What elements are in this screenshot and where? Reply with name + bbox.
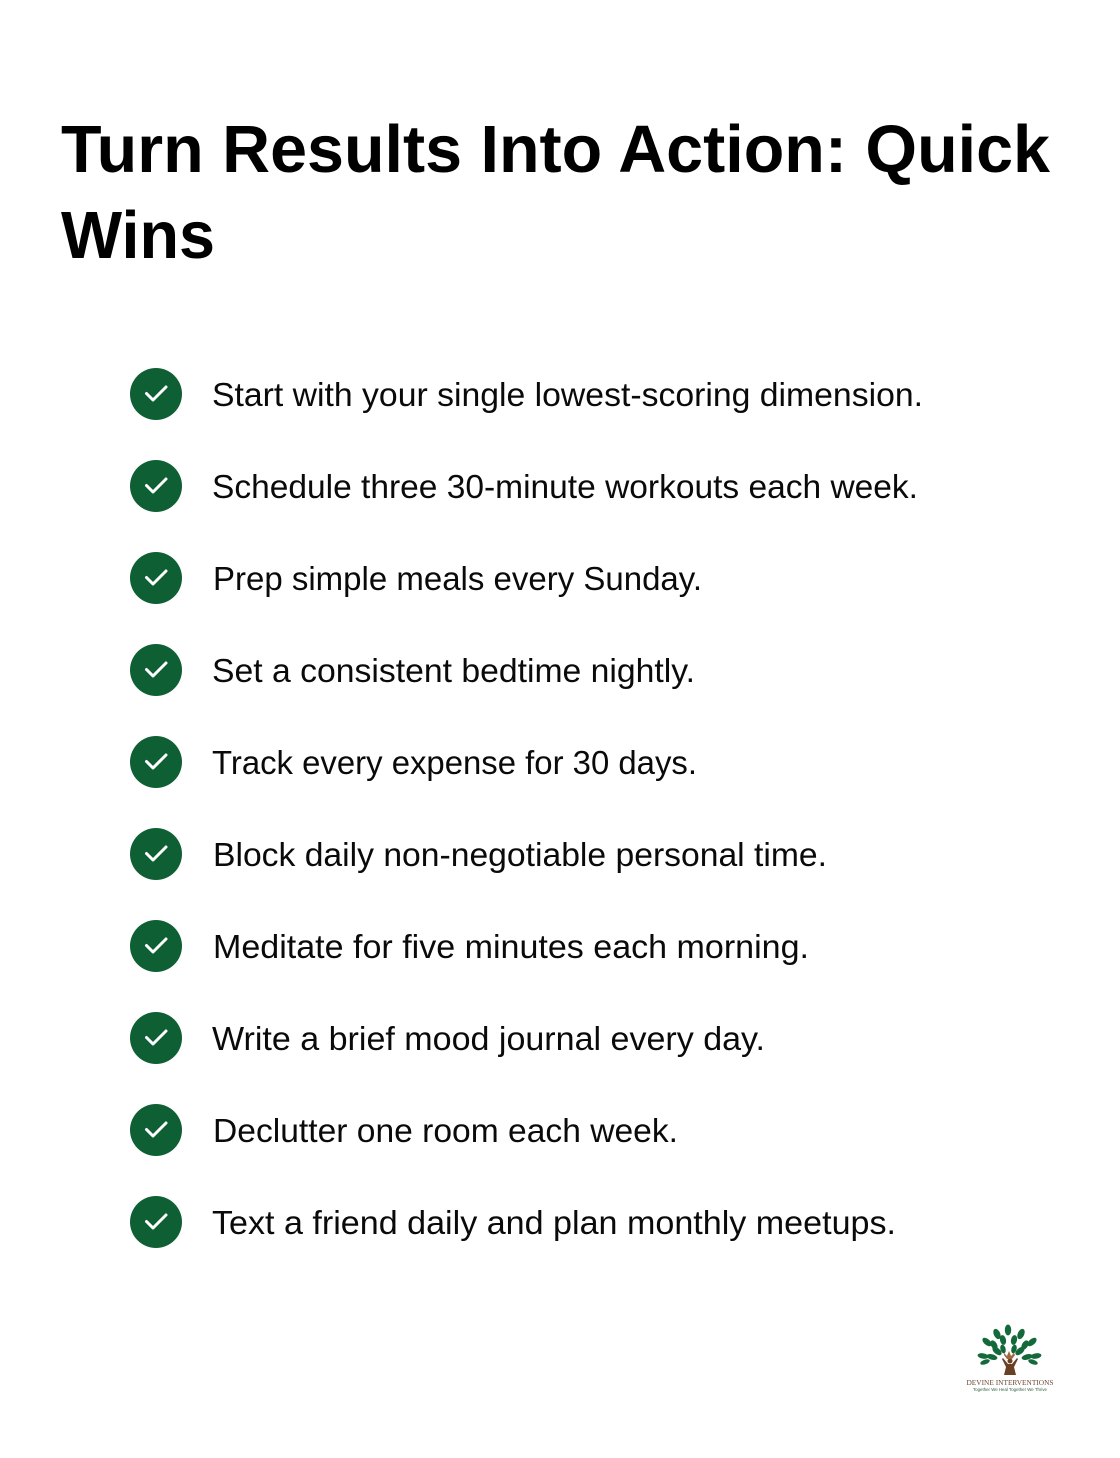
- item 10: [130, 1196, 896, 1248]
- item 3: Prep simple meals every Sunday.: [213, 561, 702, 598]
- item 4: Set a consistent bedtime nightly.: [212, 653, 695, 690]
- item 3: [130, 552, 702, 604]
- item 2: [130, 460, 918, 512]
- item 9: Declutter one room each week.: [213, 1113, 678, 1150]
- item 8: [130, 1012, 765, 1064]
- icon: tree leaves: [977, 1324, 1042, 1366]
- item 5: Track every expense for 30 days.: [212, 745, 697, 782]
- item 1: [130, 368, 923, 420]
- item 5: [130, 736, 697, 788]
- title: Wins: [61, 198, 215, 273]
- item 10: Text a friend daily and plan monthly meetups.: [212, 1205, 896, 1242]
- item 7: Meditate for five minutes each morning.: [213, 929, 809, 966]
- checklist: [130, 368, 923, 1248]
- item 6: [130, 828, 827, 880]
- logo: Devine Interventions tree: [966, 1324, 1054, 1392]
- item 7: [130, 920, 809, 972]
- item 1: Start with your single lowest-scoring dimension.: [212, 377, 923, 414]
- title: Turn Results Into Action: Quick: [61, 112, 1051, 187]
- title: [61, 112, 1051, 273]
- item 4: [130, 644, 695, 696]
- item 8: Write a brief mood journal every day.: [212, 1021, 765, 1058]
- item 9: [130, 1104, 678, 1156]
- item 2: Schedule three 30-minute workouts each week.: [212, 469, 918, 506]
- icon: trunk figure: [1002, 1351, 1018, 1375]
- logo name: DEVINE INTERVENTIONS: [966, 1379, 1054, 1387]
- item 6: Block daily non-negotiable personal time.: [213, 837, 827, 874]
- logo tagline: Together We Heal Together We Thrive: [973, 1387, 1047, 1392]
